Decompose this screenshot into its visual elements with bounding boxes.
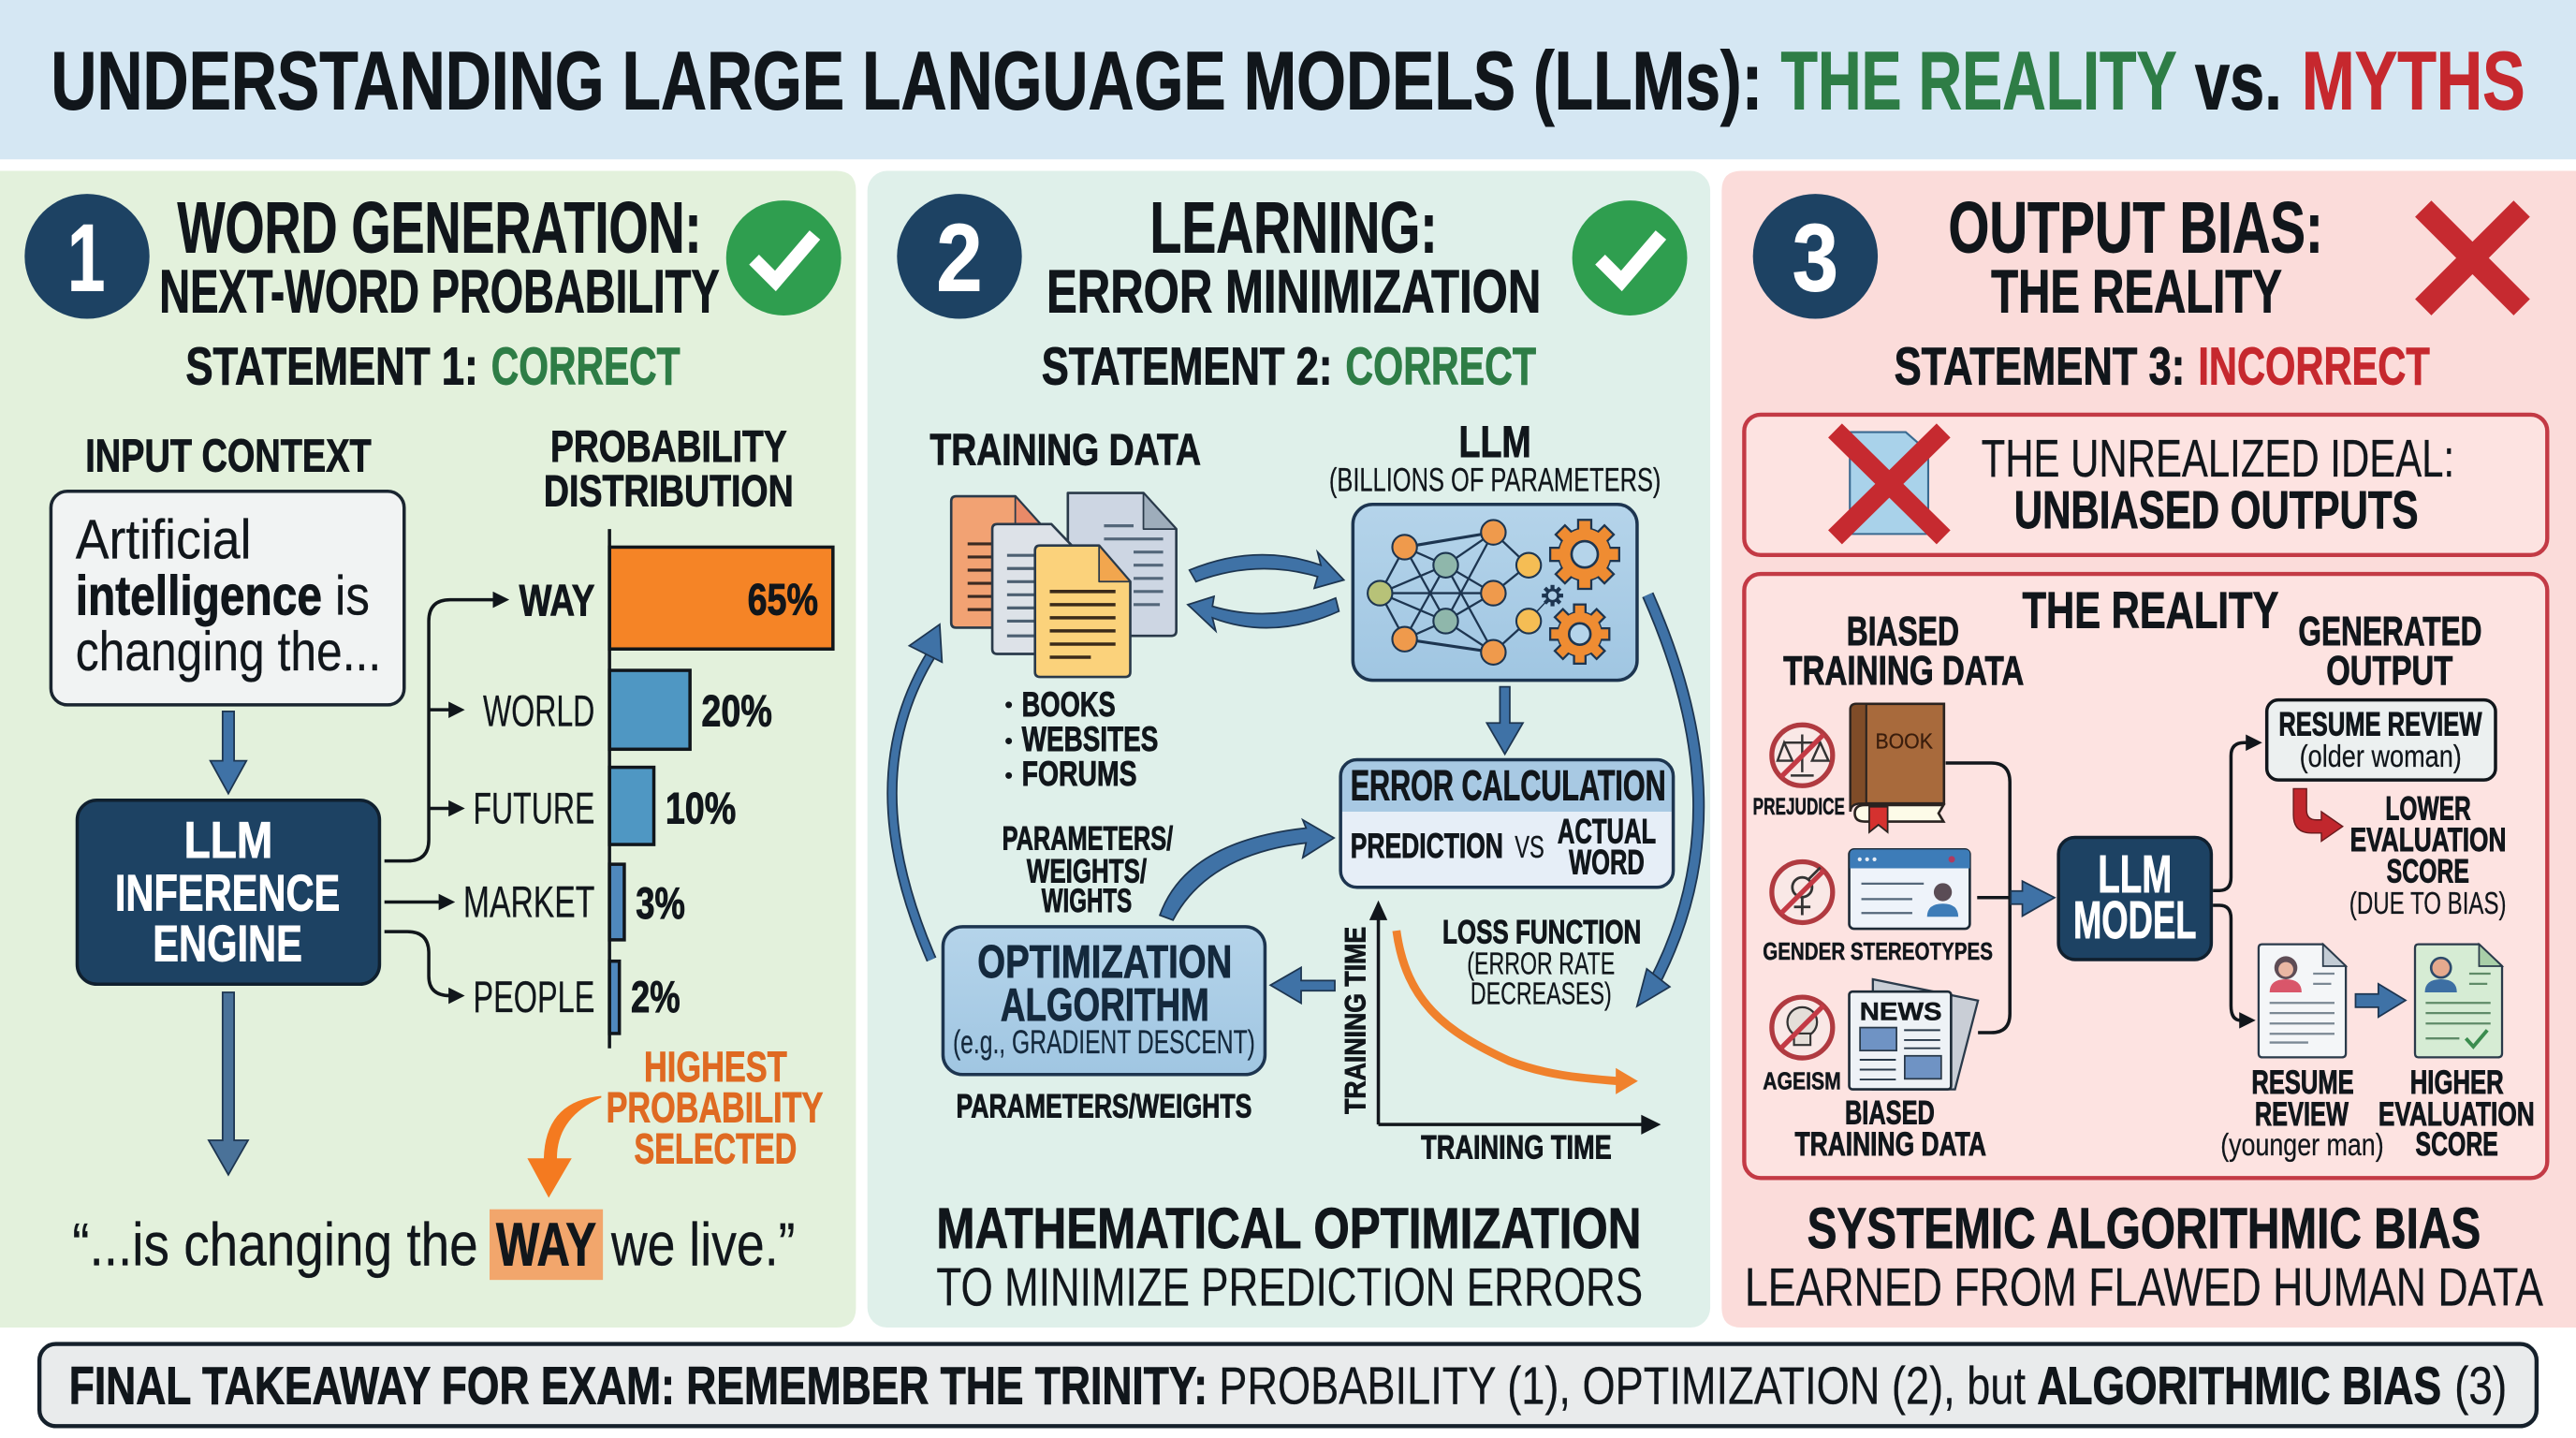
bar chart: next word probabilities: WAY <box>520 576 594 625</box>
optimization algorithm box: OPTIMIZATION <box>977 937 1232 988</box>
label: gender stereotypes: GENDER STEREOTYPES <box>1763 937 1993 965</box>
icon: gears <box>1542 520 1619 664</box>
arrows: engine to word candidates <box>385 600 494 996</box>
LLM inference engine box <box>77 800 379 984</box>
number badge 3: 3 <box>1793 205 1838 312</box>
optimization algorithm box: ALGORITHM <box>1001 980 1209 1031</box>
input context box: changing the... <box>76 620 381 682</box>
final takeaway bar: FINAL TAKEAWAY FOR EXAM: REMEMBER THE TRINITY: <box>69 1357 1208 1416</box>
bar chart: next word probabilities: WORLD <box>483 687 594 737</box>
resume review older woman box <box>2267 700 2496 780</box>
icon: browser profile <box>1850 849 1969 929</box>
panel 2 conclusion <box>936 1196 1643 1317</box>
data source list: FORUMS <box>1022 755 1137 793</box>
callout: highest probability selected: SELECTED <box>634 1125 797 1173</box>
axis label: training time horizontal: TRAINING TIME <box>1421 1129 1612 1166</box>
label: input context: INPUT CONTEXT <box>85 432 372 482</box>
resume review older woman box: RESUME REVIEW <box>2278 706 2482 742</box>
number badge 2 <box>897 194 1022 318</box>
label: biased training data top: TRAINING DATA <box>1783 648 2024 694</box>
LLM inference engine box: ENGINE <box>153 916 302 973</box>
label: parameters weights wights: PARAMETERS/ <box>1003 820 1173 857</box>
label: higher evaluation score: SCORE <box>2416 1126 2498 1163</box>
arrow: LLM to error calculation <box>1486 687 1523 755</box>
label: LLM billions of parameters <box>1329 418 1661 499</box>
error calculation box <box>1340 760 1674 888</box>
icon: book: BOOK <box>1875 729 1933 754</box>
heading: output bias: OUTPUT BIAS: <box>1949 187 2323 268</box>
label: probability distribution: DISTRIBUTION <box>544 467 794 517</box>
panel: statement 1 word generation <box>0 171 856 1328</box>
bar chart: next word probabilities: FUTURE <box>473 784 594 833</box>
number badge 3 <box>1753 194 1878 318</box>
arrow: optimization to error <box>1160 820 1334 920</box>
LLM model box: LLM <box>2098 844 2172 903</box>
label: biased training data top: BIASED <box>1847 609 1959 654</box>
bar chart: next word probabilities: 10% <box>666 784 736 833</box>
header banner <box>0 0 2576 159</box>
statement 2 verdict: CORRECT <box>1345 337 1536 396</box>
generated sentence <box>72 1210 795 1280</box>
icon: crossed out document <box>1835 431 1943 537</box>
bar chart: next word probabilities: MARKET <box>463 877 594 927</box>
bar chart: next word probabilities: PEOPLE <box>473 973 594 1022</box>
arrow: data to LLM <box>1190 552 1344 588</box>
label: lower evaluation score: SCORE <box>2387 853 2469 889</box>
callout: highest probability selected: PROBABILITY <box>607 1084 823 1132</box>
label: generated output: GENERATED <box>2298 609 2481 654</box>
data source list: BOOKS <box>1022 685 1116 724</box>
label: biased training data top <box>1783 609 2024 694</box>
statement 3 verdict: STATEMENT 3: <box>1895 337 2185 396</box>
statement 1 verdict: CORRECT <box>491 337 681 396</box>
generated sentence: WAY <box>496 1210 596 1278</box>
error calculation box: VS <box>1515 830 1544 865</box>
error calculation box: WORD <box>1569 844 1645 882</box>
heading: word generation: NEXT-WORD PROBABILITY <box>159 257 720 325</box>
icon: newspaper <box>1850 979 1978 1090</box>
box: unrealized ideal <box>1744 415 2547 555</box>
axis label: training time vertical: TRAINING TIME <box>1338 927 1371 1114</box>
arrow: loss to optimization <box>1270 967 1335 1004</box>
callout: highest probability selected: HIGHEST <box>644 1043 787 1091</box>
label: generated output <box>2298 609 2481 694</box>
box: unrealized ideal: UNBIASED OUTPUTS <box>2014 480 2419 539</box>
heading: learning: LEARNING: <box>1150 187 1438 268</box>
label: parameters weights: PARAMETERS/WEIGHTS <box>956 1088 1251 1124</box>
number badge 2: 2 <box>936 205 983 312</box>
label: loss function: DECREASES) <box>1471 976 1612 1011</box>
callout: highest probability selected <box>607 1043 823 1173</box>
box: the reality <box>1744 574 2547 1178</box>
arrow: orange selection <box>527 1096 601 1197</box>
label: biased training data bottom: BIASED <box>1845 1094 1935 1131</box>
heading: word generation: WORD GENERATION: <box>178 187 701 268</box>
data source list <box>1005 685 1158 793</box>
heading: word generation <box>159 187 720 325</box>
label: loss function: LOSS FUNCTION <box>1442 914 1641 950</box>
final takeaway bar: (3) <box>2454 1357 2507 1416</box>
label: loss function <box>1442 914 1641 1011</box>
label: parameters weights wights: WIGHTS <box>1042 883 1132 919</box>
bar chart: next word probabilities: 2% <box>631 973 681 1022</box>
icon: green check <box>1573 200 1687 315</box>
heading: the reality: THE REALITY <box>2023 581 2278 638</box>
generated sentence: we live.” <box>610 1210 795 1278</box>
icon: newspaper: NEWS <box>1860 996 1942 1025</box>
arrow: loop back to training data <box>892 624 942 960</box>
heading: learning <box>1046 187 1541 325</box>
arrow: lower score <box>2293 788 2343 842</box>
error calculation box: PREDICTION <box>1351 827 1503 865</box>
input context box: Artificial <box>76 508 252 571</box>
label: lower evaluation score: (DUE TO BIAS) <box>2349 887 2507 921</box>
statement 3 verdict <box>1895 337 2430 396</box>
arrow: engine to sentence <box>209 992 248 1175</box>
label: parameters weights wights: WEIGHTS/ <box>1027 853 1147 889</box>
label: resume review younger man: RESUME <box>2251 1064 2354 1101</box>
loss function chart <box>1338 901 1661 1166</box>
generated sentence: “...is changing the <box>72 1210 478 1278</box>
neural network diagram <box>1368 520 1553 665</box>
icon: red X <box>2423 209 2522 307</box>
final takeaway bar: PROBABILITY (1), OPTIMIZATION (2), but <box>1219 1357 2026 1416</box>
panel 3 conclusion <box>1745 1196 2543 1317</box>
icon: green evaluation document <box>2415 945 2502 1057</box>
label: LLM billions of parameters: (BILLIONS OF PARAMETERS) <box>1329 462 1661 499</box>
LLM inference engine box: INFERENCE <box>115 864 340 921</box>
icon: green check <box>726 200 842 315</box>
input context box <box>51 492 404 705</box>
label: lower evaluation score <box>2349 791 2507 921</box>
label: resume review younger man <box>2220 1064 2384 1163</box>
arrow: resume to higher score <box>2355 984 2406 1017</box>
icon: no prejudice scales <box>1772 725 1833 785</box>
label: probability distribution: PROBABILITY <box>550 422 787 472</box>
label: resume review younger man: (younger man) <box>2220 1128 2384 1163</box>
label: LLM billions of parameters: LLM <box>1459 418 1531 467</box>
input context box: is <box>335 564 370 626</box>
arrow: LLM to data <box>1188 596 1339 631</box>
title: UNDERSTANDING LARGE LANGUAGE MODELS (LLMs): <box>51 36 1763 127</box>
error calculation box: ERROR CALCULATION <box>1351 762 1666 810</box>
icon: no ageism skull <box>1772 997 1833 1058</box>
bar chart: next word probabilities <box>463 529 833 1049</box>
label: higher evaluation score <box>2378 1064 2535 1163</box>
final takeaway bar <box>39 1344 2537 1426</box>
label: parameters weights wights <box>1003 820 1173 919</box>
icon: document stack <box>951 493 1177 677</box>
panel 2 conclusion: TO MINIMIZE PREDICTION ERRORS <box>936 1257 1643 1317</box>
icon: resume younger man document <box>2259 945 2346 1057</box>
title: THE REALITY <box>1781 36 2177 127</box>
panel 2 conclusion: MATHEMATICAL OPTIMIZATION <box>936 1196 1641 1261</box>
heading: output bias <box>1949 187 2323 325</box>
statement 2 verdict: STATEMENT 2: <box>1042 337 1332 396</box>
optimization algorithm box: (e.g., GRADIENT DESCENT) <box>953 1024 1255 1061</box>
label: resume review younger man: REVIEW <box>2255 1096 2349 1133</box>
heading: learning: ERROR MINIMIZATION <box>1046 257 1541 325</box>
bar chart: next word probabilities: 65% <box>748 575 818 624</box>
title: vs. <box>2195 36 2282 127</box>
bar chart: next word probabilities: 3% <box>636 879 685 929</box>
bar chart: next word probabilities: 20% <box>701 687 772 737</box>
LLM model box: MODEL <box>2073 890 2197 949</box>
number badge 1: 1 <box>67 205 105 312</box>
panel: statement 3 output bias <box>1721 171 2576 1328</box>
panel: statement 2 learning <box>868 171 1710 1328</box>
final takeaway bar: ALGORITHMIC BIAS <box>2037 1357 2441 1416</box>
input context box: intelligence <box>76 564 322 626</box>
LLM model box <box>2058 838 2211 960</box>
label: lower evaluation score: EVALUATION <box>2350 822 2506 858</box>
statement 1 verdict: STATEMENT 1: <box>185 337 478 396</box>
optimization algorithm box <box>943 927 1265 1075</box>
label: biased training data bottom <box>1794 1094 1986 1163</box>
error calculation box: ACTUAL <box>1558 812 1656 850</box>
connectors: biased sources into model <box>1946 763 2055 1033</box>
label: prejudice: PREJUDICE <box>1753 795 1845 820</box>
label: probability distribution <box>544 422 794 517</box>
heading: output bias: THE REALITY <box>1991 257 2282 325</box>
label: loss function: (ERROR RATE <box>1467 947 1615 982</box>
connectors: model to outputs <box>2213 742 2247 1020</box>
label: training data: TRAINING DATA <box>929 426 1201 476</box>
data source list: WEBSITES <box>1022 720 1158 758</box>
resume review older woman box: (older woman) <box>2300 740 2462 774</box>
label: lower evaluation score: LOWER <box>2385 791 2471 828</box>
label: biased training data bottom: TRAINING DATA <box>1794 1126 1986 1163</box>
number badge 1 <box>24 194 150 318</box>
label: higher evaluation score: HIGHER <box>2410 1064 2504 1101</box>
LLM network box <box>1353 505 1637 681</box>
arrow: LLM loop to loss chart <box>1637 594 1699 1006</box>
icon: no gender stereotypes <box>1772 862 1833 922</box>
label: ageism: AGEISM <box>1763 1067 1841 1095</box>
label: generated output: OUTPUT <box>2326 648 2453 694</box>
arrow: input to engine <box>211 712 246 794</box>
LLM inference engine box: LLM <box>184 812 272 869</box>
statement 3 verdict: INCORRECT <box>2198 337 2430 396</box>
icon: book <box>1851 704 1944 832</box>
